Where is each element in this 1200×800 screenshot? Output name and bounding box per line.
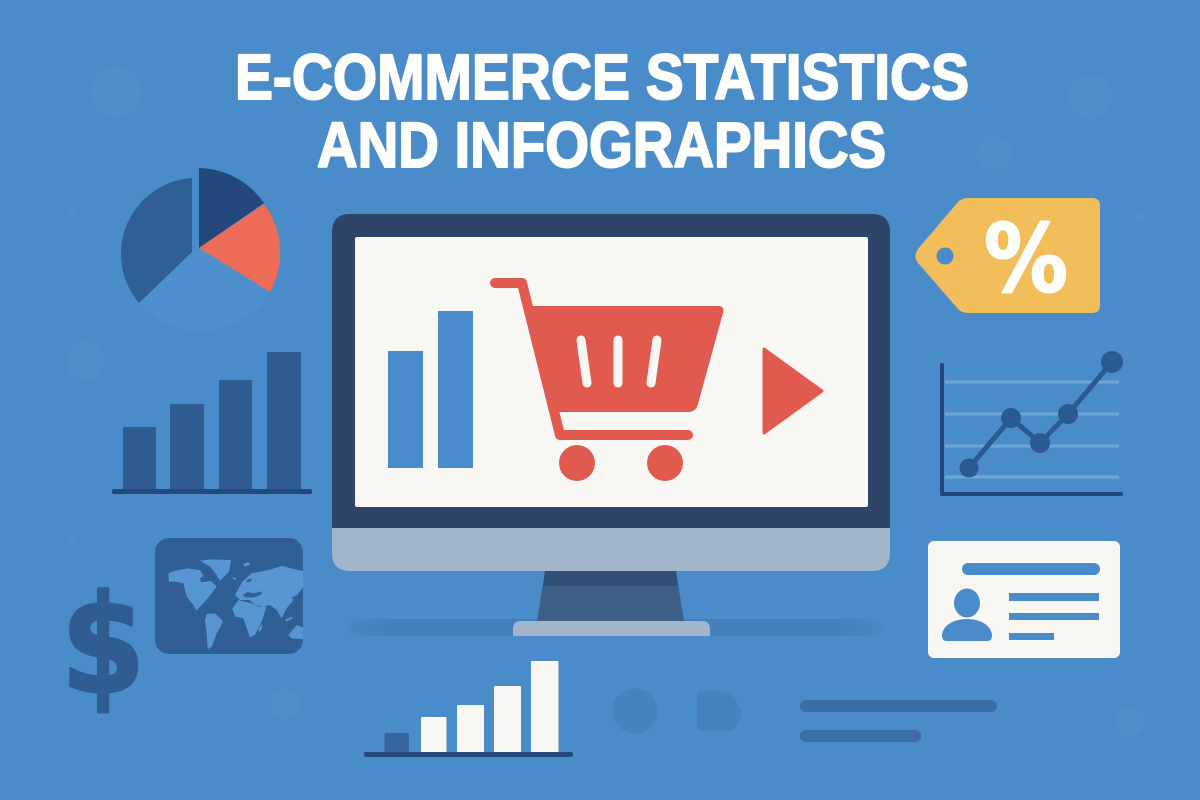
profile card (928, 541, 1120, 658)
title line 2: AND INFOGRAPHICS (317, 109, 886, 181)
monitor chin (332, 528, 890, 571)
monitor frame (332, 214, 890, 528)
faint circle (612, 688, 658, 734)
bar chart: left (112, 352, 312, 494)
monitor screen (355, 237, 868, 507)
monitor base (513, 621, 710, 636)
icon: dollar sign: $ (61, 567, 145, 725)
placeholder text lines (800, 700, 997, 742)
monitor (332, 214, 890, 636)
pie slice: navy (199, 168, 264, 248)
icon: percent price tag: % (984, 205, 1068, 314)
icon: shopping cart (495, 283, 723, 481)
pie slice: light blue (139, 248, 270, 331)
monitor shadow (346, 619, 882, 636)
title line 1: E-COMMERCE STATISTICS (235, 41, 969, 113)
pie chart (121, 168, 280, 331)
pie slice: coral (199, 204, 280, 292)
icon: user (942, 588, 992, 641)
icon: percent price tag (916, 198, 1100, 314)
title (235, 41, 969, 181)
icon: play arrow (764, 349, 822, 433)
pie slice: mid blue (121, 178, 192, 303)
bar chart: bottom (364, 661, 573, 757)
line chart (942, 351, 1123, 494)
monitor stand (537, 571, 684, 621)
screen bar chart (388, 311, 473, 468)
icon: world map (155, 538, 305, 654)
faint rounded shape (697, 691, 741, 731)
